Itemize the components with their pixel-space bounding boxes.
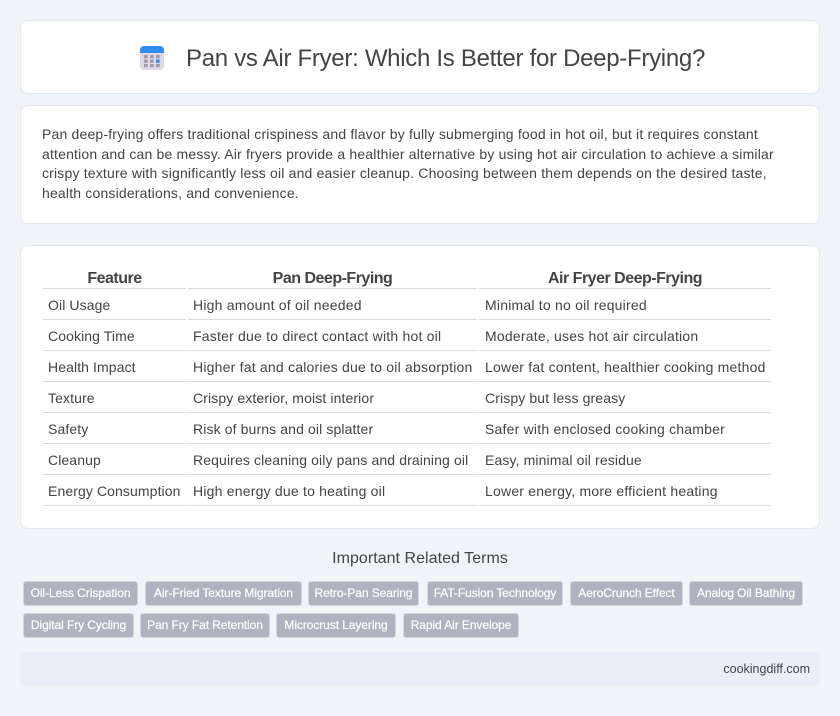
tag [570, 581, 683, 606]
table header: Feature [87, 270, 142, 287]
row: energy consumption [48, 483, 718, 499]
tag [308, 581, 419, 606]
panel: comparison table: Faster due to direct contact with hot oil [193, 328, 441, 344]
tag: Oil-Less Crispation [31, 586, 130, 600]
row: health impact [48, 359, 766, 375]
tag: Rapid Air Envelope [411, 618, 511, 632]
row: safety: Safety [48, 421, 88, 437]
tag: Analog Oil Bathing [697, 586, 795, 600]
footer credit: cookingdiff.com [723, 662, 810, 676]
tag: Microcrust Layering [284, 618, 388, 632]
intro text: Pan deep-frying offers traditional crispiness and flavor by fully submerging food in hot oil, but it requires constant [42, 126, 758, 142]
panel: comparison table: Higher fat and calories due to oil absorption [193, 359, 473, 375]
row: oil usage: Oil Usage [48, 297, 110, 313]
row: cleanup: Cleanup [48, 452, 101, 468]
table header: Pan Deep-Frying [273, 270, 392, 287]
tag: AeroCrunch Effect [578, 586, 675, 600]
icon: calendar [140, 46, 164, 70]
tag [145, 581, 302, 606]
panel: comparison table: Easy, minimal oil residue [485, 452, 642, 468]
panel: comparison table: Minimal to no oil required [485, 297, 647, 313]
row: cooking time [48, 328, 698, 344]
tag: Air-Fried Texture Migration [154, 586, 293, 600]
intro text: attention and can be messy. Air fryers provide a healthier alternative by using hot air circulation to achieve a similar [42, 146, 774, 162]
panel: comparison table: Lower fat content, healthier cooking method [485, 359, 766, 375]
panel: comparison table: Risk of burns and oil splatter [193, 421, 373, 437]
tag [140, 613, 270, 638]
row: energy consumption: Energy Consumption [48, 483, 181, 499]
panel: comparison table [20, 245, 820, 529]
row: oil usage [48, 297, 647, 313]
panel: intro [20, 105, 820, 224]
tag: Pan Fry Fat Retention [147, 618, 263, 632]
tag: FAT-Fusion Technology [434, 586, 556, 600]
panel: comparison table: Crispy but less greasy [485, 390, 625, 406]
panel: header [20, 20, 820, 94]
row: texture [48, 390, 626, 406]
intro text: health considerations, and convenience. [42, 185, 299, 201]
panel: comparison table: High amount of oil needed [193, 297, 362, 313]
panel: comparison table: Safer with enclosed cooking chamber [485, 421, 725, 437]
panel: comparison table: Requires cleaning oily pans and draining oil [193, 452, 468, 468]
title: Pan vs Air Fryer: Which Is Better for Deep-Frying? [186, 45, 705, 72]
footer [20, 652, 820, 686]
intro text [42, 126, 774, 201]
table header [87, 270, 702, 287]
panel: comparison table: Moderate, uses hot air circulation [485, 328, 698, 344]
intro text: crispy texture with significantly less oil and easier cleanup. Choosing between them depends on the desired taste, [42, 165, 767, 181]
panel: comparison table: Lower energy, more efficient heating [485, 483, 718, 499]
panel: comparison table: High energy due to heating oil [193, 483, 385, 499]
tags: related terms [23, 581, 803, 638]
row: cooking time: Cooking Time [48, 328, 135, 344]
tag [403, 613, 519, 638]
tag: Digital Fry Cycling [31, 618, 126, 632]
tag [23, 581, 138, 606]
tag: Retro-Pan Searing [314, 586, 413, 600]
row: cleanup [48, 452, 642, 468]
table header: Air Fryer Deep-Frying [548, 270, 702, 287]
tag [23, 613, 134, 638]
row: health impact: Health Impact [48, 359, 136, 375]
tag [689, 581, 803, 606]
tag [427, 581, 563, 606]
row: safety [48, 421, 725, 437]
row: texture: Texture [48, 390, 95, 406]
tag [276, 613, 396, 638]
heading: related terms: Important Related Terms [332, 550, 508, 567]
panel: comparison table: Crispy exterior, moist interior [193, 390, 374, 406]
